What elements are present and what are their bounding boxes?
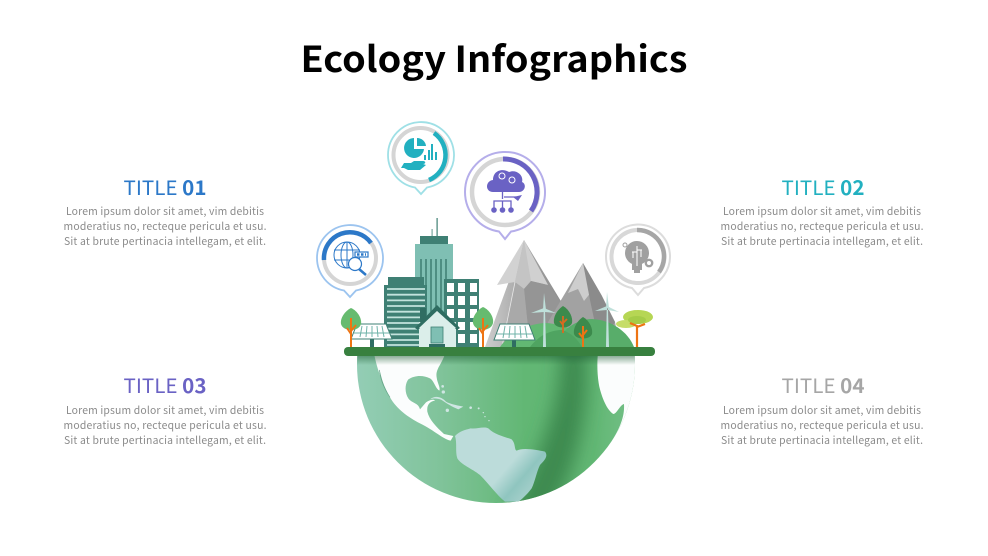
text block: title 01: moderatius no, recteque pericula et usu. (64, 218, 267, 233)
text block: title 02: Sit at brute pertinacia intellegam, et elit. (721, 233, 923, 248)
text block: title 01: Sit at brute pertinacia intellegam, et elit. (64, 233, 266, 248)
text block: title 03: Lorem ipsum dolor sit amet, vim debitis (66, 402, 264, 417)
text block: title 04 (720, 370, 924, 447)
text block: title 04: TITLE 04 (782, 370, 865, 399)
text block: title 02: Lorem ipsum dolor sit amet, vim debitis (723, 203, 921, 218)
text block: title 01: TITLE 01 (124, 172, 206, 201)
text block: title 04: Sit at brute pertinacia intellegam, et elit. (721, 432, 923, 447)
window building (444, 279, 479, 347)
mountains (485, 240, 620, 347)
south america (455, 427, 546, 502)
text block: title 01: Lorem ipsum dolor sit amet, vim debitis (66, 203, 264, 218)
globe (357, 356, 635, 503)
striped building (384, 277, 427, 347)
house (415, 305, 460, 347)
pin 4: light bulb (606, 225, 670, 295)
text block: title 04: moderatius no, recteque pericula et usu. (720, 417, 924, 432)
wind turbines (531, 292, 619, 347)
icon: pie chart and hand (401, 138, 437, 170)
text block: title 03: TITLE 03 (124, 370, 206, 399)
text block: title 03: Sit at brute pertinacia intellegam, et elit. (64, 432, 266, 447)
icon: globe and magnifier (334, 242, 368, 275)
africa (597, 356, 635, 438)
text block: title 04: Lorem ipsum dolor sit amet, vim debitis (723, 402, 921, 417)
pin 2: chart in hand (388, 122, 454, 194)
title: Ecology Infographics (300, 32, 688, 83)
text block: title 02: TITLE 02 (782, 172, 864, 201)
pin 3: cloud network (465, 152, 545, 239)
text block: title 03 (64, 370, 267, 447)
hills (500, 319, 634, 347)
solar panel left (351, 324, 392, 347)
caribbean islands (430, 385, 490, 421)
icon: bulb with gear (623, 241, 652, 273)
pin 1: web search (317, 225, 383, 297)
text block: title 02: moderatius no, recteque pericula et usu. (720, 218, 924, 233)
platform (344, 347, 655, 356)
text block: title 01 (64, 172, 267, 248)
tower (415, 218, 453, 324)
north america (373, 350, 453, 441)
solar panel right (494, 324, 535, 347)
icon: cloud and nodes (487, 170, 525, 213)
text block: title 02 (720, 172, 924, 248)
trees (341, 306, 653, 347)
text block: title 03: moderatius no, recteque pericula et usu. (64, 417, 267, 432)
buildings (384, 218, 479, 347)
